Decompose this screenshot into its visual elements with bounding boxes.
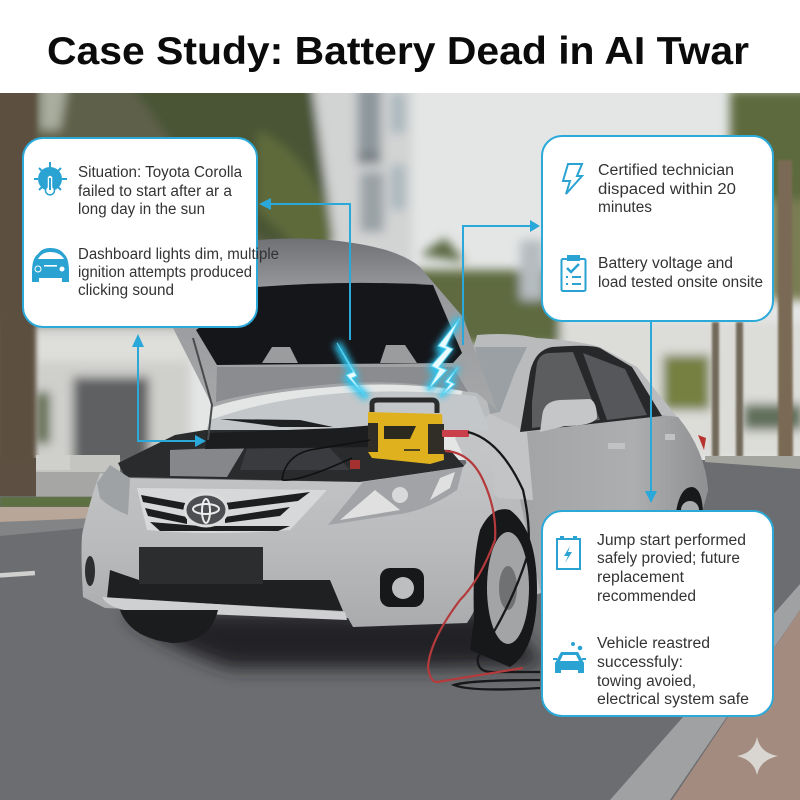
icon: clipboard xyxy=(562,256,586,291)
text: dispatch: Certified technician xyxy=(598,162,734,179)
lightning bolts xyxy=(337,318,460,398)
car side body xyxy=(460,334,708,600)
license plate xyxy=(139,547,263,584)
text: symptoms xyxy=(78,246,279,299)
arrow: technician card to result card xyxy=(645,321,657,503)
tail light xyxy=(698,435,706,450)
text: result: Vehicle reastred xyxy=(597,635,710,652)
icon: battery xyxy=(557,536,580,569)
text: symptoms: ignition attempts produced xyxy=(78,264,252,281)
wiper arm xyxy=(220,419,333,427)
text: result xyxy=(597,635,749,708)
text: testing xyxy=(598,255,763,291)
text: result: electrical system safe xyxy=(597,691,749,708)
panel: outcome xyxy=(542,511,773,716)
wiper band xyxy=(205,425,375,449)
title: Case Study: Battery Dead in AI Twar xyxy=(47,30,749,73)
text: symptoms: Dashboard lights dim, multiple xyxy=(78,246,279,263)
text: symptoms: clicking sound xyxy=(78,282,174,299)
front fender xyxy=(455,414,533,500)
bolt: center xyxy=(337,343,367,398)
car shadow xyxy=(125,612,545,668)
right headlight xyxy=(328,467,463,525)
red cable xyxy=(428,451,523,682)
panel: situation xyxy=(23,138,279,327)
text: testing: load tested onsite onsite xyxy=(598,274,763,291)
lower grille xyxy=(107,570,343,611)
text: jump start: recommended xyxy=(597,588,696,605)
door handles xyxy=(608,434,675,449)
text: jump start xyxy=(597,532,746,605)
front-left tyre xyxy=(120,610,218,643)
side windows xyxy=(520,346,662,432)
text: situation: long day in the sun xyxy=(78,201,205,218)
text: situation: Situation: Toyota Corolla xyxy=(78,164,242,181)
text: situation xyxy=(78,164,242,218)
toyota logo xyxy=(185,494,227,526)
text: dispatch: dispaced within 20 xyxy=(598,181,736,198)
text: jump start: Jump start performed xyxy=(597,532,746,549)
text: testing: Battery voltage and xyxy=(598,255,733,272)
front-right tyre and wheel xyxy=(470,509,537,667)
jump starter xyxy=(368,400,469,464)
car xyxy=(82,239,708,689)
black cable xyxy=(454,432,540,689)
engine bay xyxy=(118,430,465,482)
mirror xyxy=(540,399,597,432)
door panels xyxy=(520,415,708,590)
icon: lightning bolt outline xyxy=(563,164,582,194)
arrow: situation card to engine bay xyxy=(132,334,206,447)
right fog lamp xyxy=(380,568,424,607)
upper grille xyxy=(137,488,327,533)
icon: dashboard car xyxy=(32,248,69,282)
hinge strut xyxy=(193,338,212,440)
front bumper xyxy=(82,440,495,627)
arrow: bay to technician card xyxy=(463,220,540,345)
chrome strip xyxy=(102,597,347,620)
panel: response xyxy=(542,136,773,321)
icon: sun thermometer xyxy=(34,162,67,195)
icon: sparkle watermark xyxy=(737,737,778,775)
engine cable coil xyxy=(282,440,370,480)
text: dispatch xyxy=(598,162,736,216)
text: result: towing avoied, xyxy=(597,673,696,690)
windshield xyxy=(475,347,527,414)
text: situation: failed to start after ar a xyxy=(78,183,232,200)
open hood xyxy=(173,239,497,410)
icon: clean car xyxy=(553,642,586,673)
text: jump start: replacement xyxy=(597,569,685,586)
left fog lamp xyxy=(85,556,95,586)
text: dispatch: minutes xyxy=(598,199,652,216)
left headlight xyxy=(97,465,130,515)
text: result: successfuly: xyxy=(597,654,683,671)
bolt: right large xyxy=(428,318,460,390)
arrow: hood to situation card xyxy=(259,198,350,340)
windshield base xyxy=(205,391,490,436)
rear wheel xyxy=(676,487,703,519)
red terminal xyxy=(350,460,360,469)
hood underside xyxy=(196,283,462,365)
text: jump start: safely provied; future xyxy=(597,550,740,567)
bolt: right small xyxy=(440,367,458,397)
